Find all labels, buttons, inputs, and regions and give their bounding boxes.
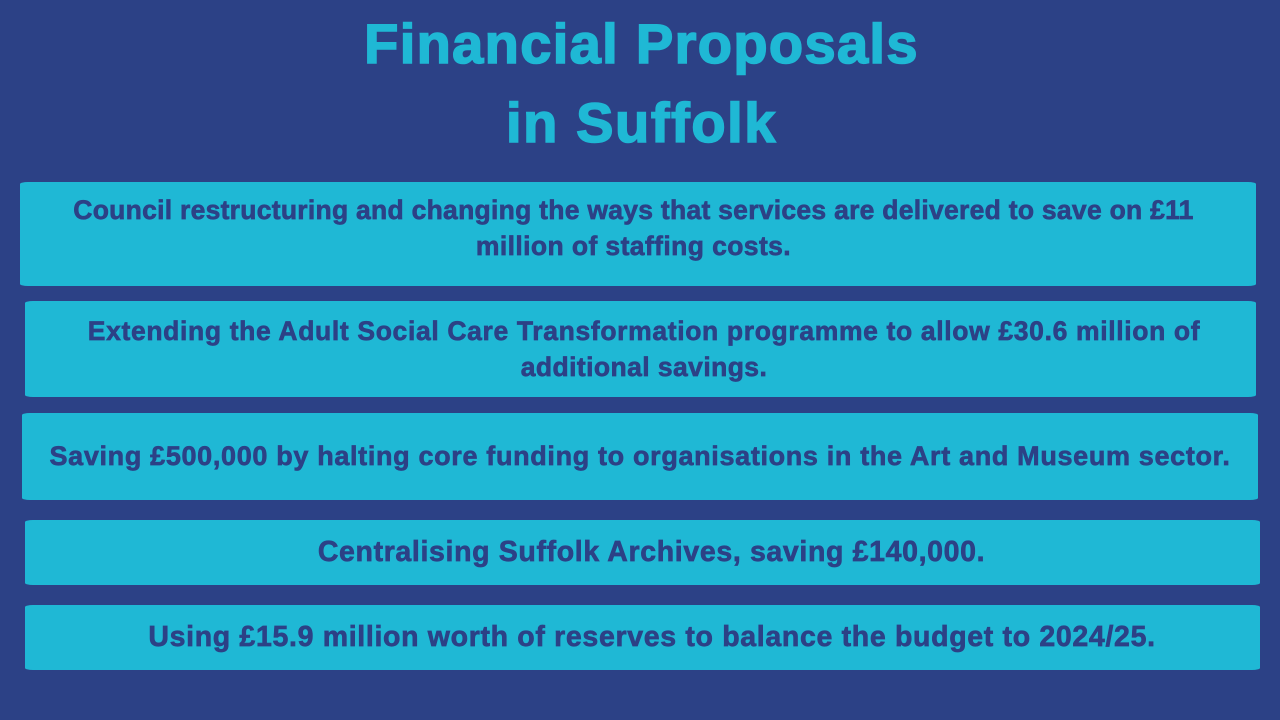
panel: suffolk archives bbox=[25, 520, 1260, 585]
text: council restructuring: million of staffing costs. bbox=[476, 231, 791, 261]
title bbox=[364, 12, 919, 154]
panel: adult social care bbox=[25, 301, 1256, 397]
text: adult social care: additional savings. bbox=[521, 352, 767, 382]
text: adult social care: Extending the Adult Social Care Transformation programme to allow £30.6 million of bbox=[88, 316, 1200, 346]
text: adult social care bbox=[88, 316, 1200, 382]
text: reserves: Using £15.9 million worth of reserves to balance the budget to 2024/25. bbox=[148, 621, 1156, 653]
title: Financial Proposals bbox=[364, 12, 919, 75]
panel: council restructuring bbox=[20, 182, 1256, 286]
text: council restructuring bbox=[73, 195, 1194, 261]
title: in Suffolk bbox=[506, 91, 777, 154]
text: suffolk archives: Centralising Suffolk Archives, saving £140,000. bbox=[318, 536, 985, 568]
text: art and museum funding: Saving £500,000 by halting core funding to organisations in the Art and Museum sector. bbox=[50, 441, 1230, 471]
panel: reserves bbox=[25, 605, 1260, 670]
text: council restructuring: Council restructuring and changing the ways that services are delivered to save on £11 bbox=[73, 195, 1194, 225]
panel: art and museum funding bbox=[22, 413, 1258, 500]
